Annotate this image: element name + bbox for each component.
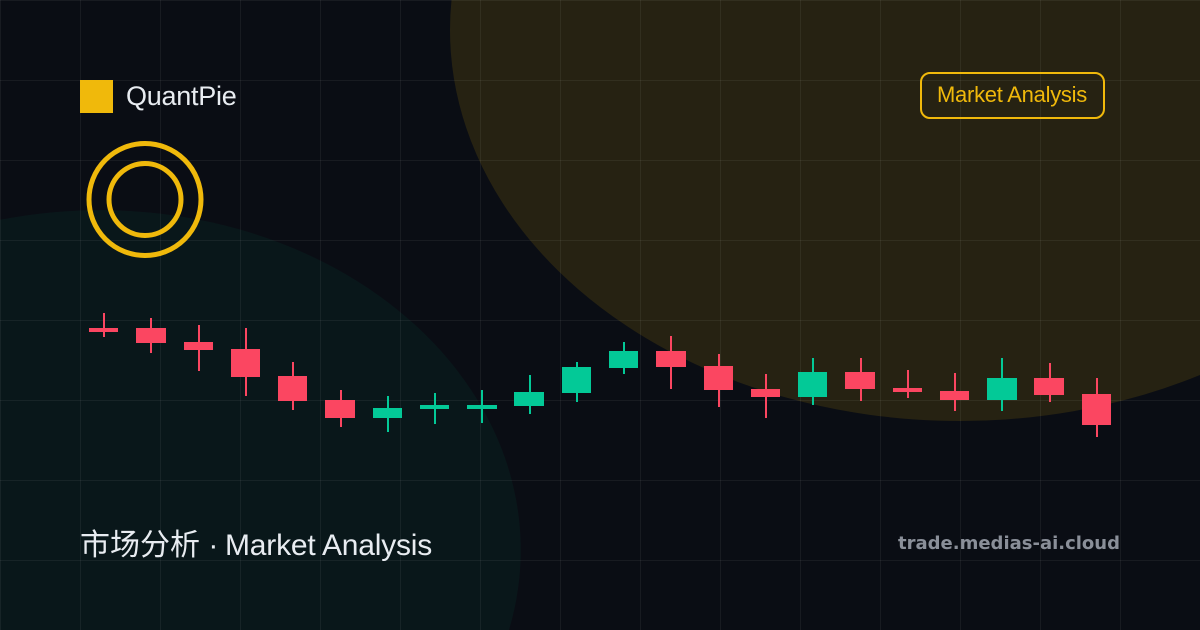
title: 市场分析 · Market Analysis: 市场分析 · [80,529,218,562]
title: 市场分析 · Market Analysis: Market Analysis [225,529,432,562]
bearish candles [89,313,1111,437]
background blob: teal ellipse [0,210,521,630]
icon: concentric rings [89,144,201,256]
brand name: QuantPie [126,81,237,111]
bullish candles [373,342,1017,432]
badge: Market Analysis [921,73,1104,118]
candlestick chart [89,313,1111,437]
logo: QuantPie brand [80,80,237,113]
icon: amber square [80,80,113,113]
domain label: trade.medias-ai.cloud [898,533,1120,554]
badge: Market Analysis: Market Analysis [937,82,1087,107]
background blob: amber ellipse [450,0,1200,421]
